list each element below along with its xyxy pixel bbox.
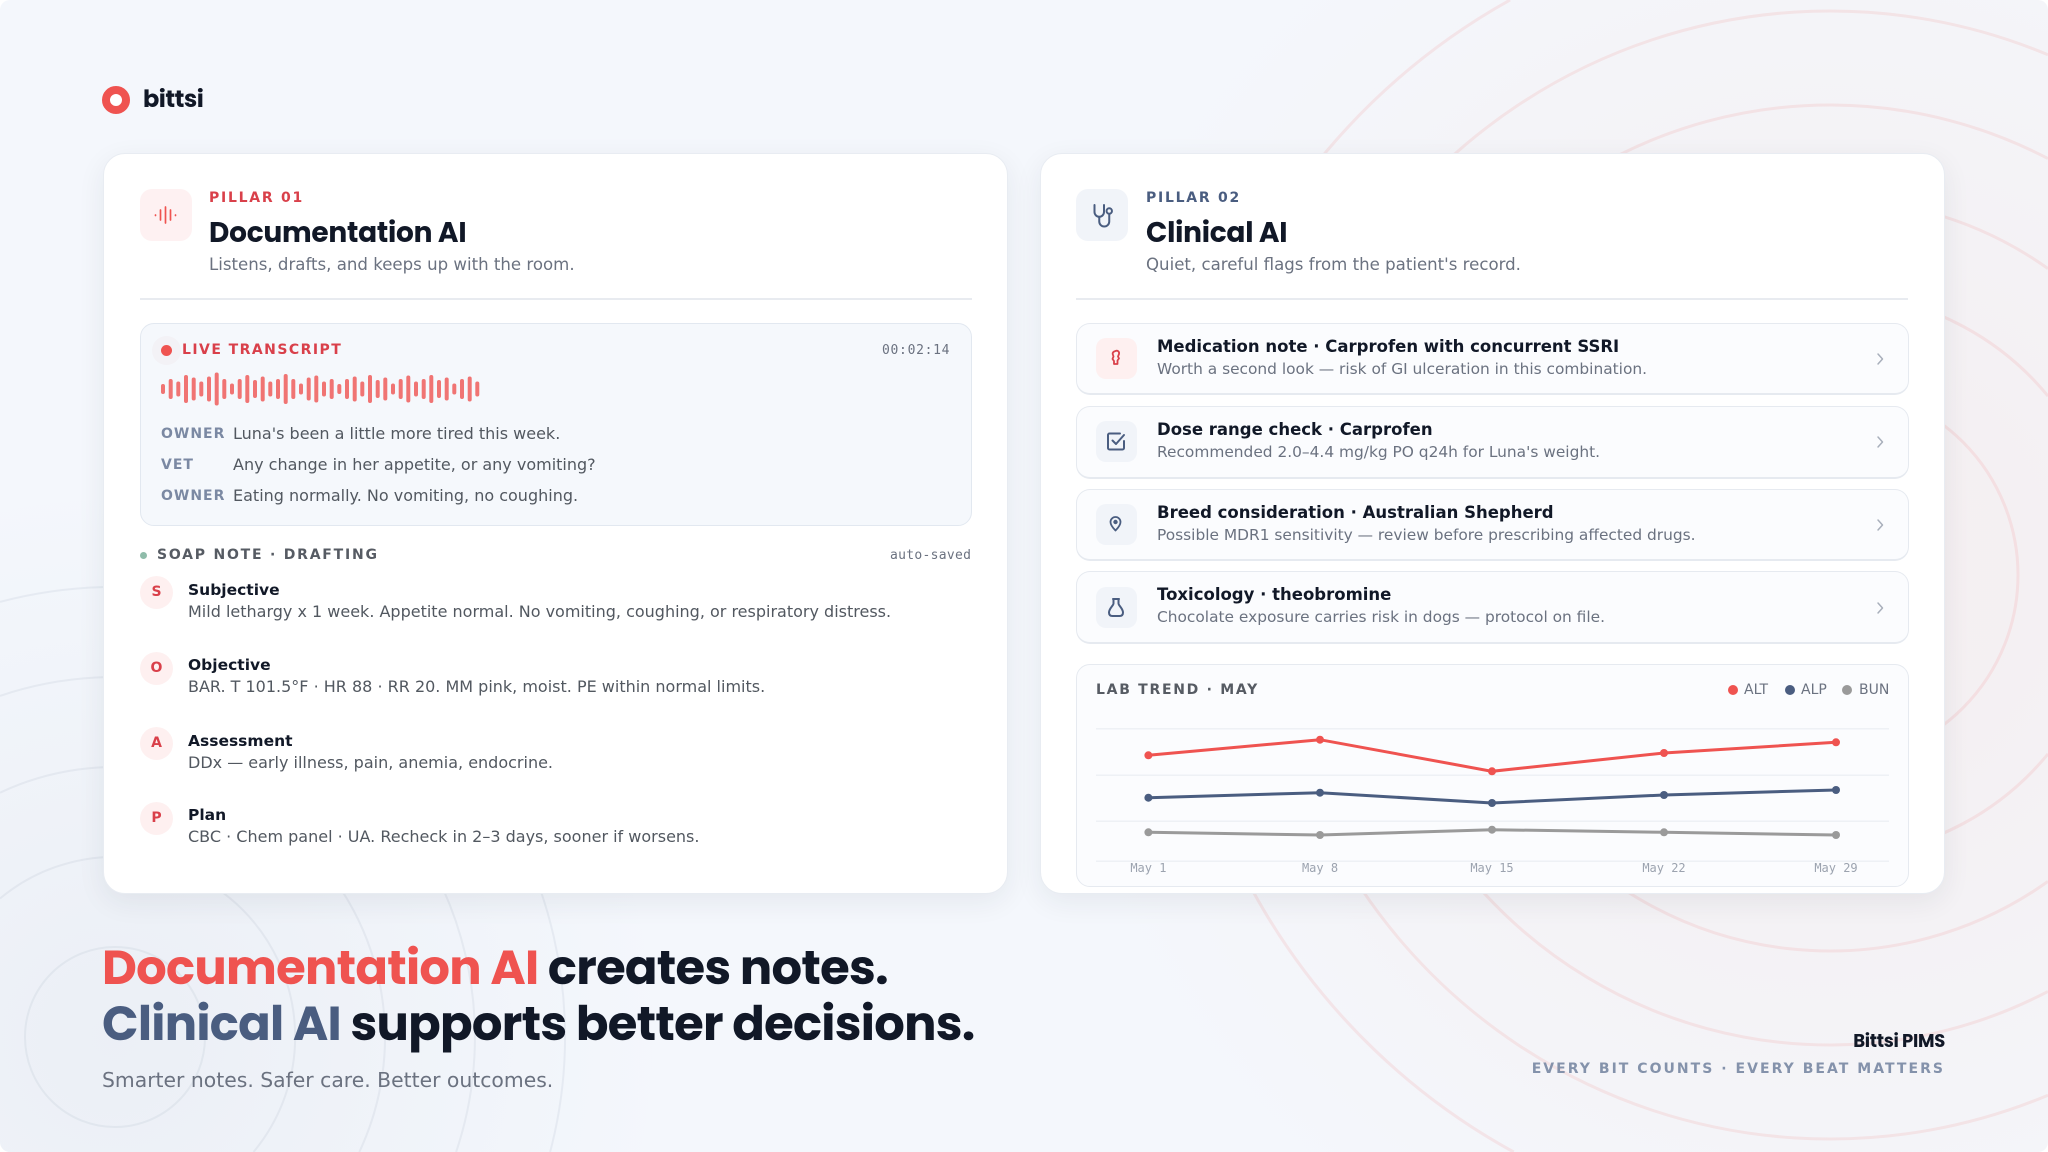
flag: breed consideration — [1076, 489, 1909, 561]
soap: objective — [140, 652, 765, 696]
soap: objective: O — [151, 660, 162, 676]
flag: breed consideration: Possible MDR1 sensitivity — review before prescribing affected drugs. — [1157, 526, 1696, 544]
flag: toxicology: Chocolate exposure carries risk in dogs — protocol on file. — [1157, 608, 1605, 626]
panel: Documentation AI — [103, 153, 1008, 894]
soap: subjective — [140, 576, 891, 621]
chart legend — [1728, 682, 1889, 698]
waveform — [161, 372, 480, 406]
series: ALP — [1144, 786, 1840, 807]
transcript line 1: Luna's been a little more tired this week. — [233, 424, 560, 443]
x axis labels: May 15 — [1470, 861, 1514, 875]
pillar 2 icon — [1076, 189, 1128, 241]
pillar 1 heading: Documentation AI — [209, 213, 466, 252]
brand name: bittsi — [143, 82, 203, 116]
x axis labels: May 29 — [1814, 861, 1858, 875]
soap: assessment: DDx — early illness, pain, anemia, endocrine. — [188, 753, 553, 772]
pillar 1 icon — [140, 189, 192, 241]
flag: medication note: Medication note · Carprofen with concurrent SSRI — [1157, 337, 1619, 356]
flag: dose range check — [1076, 406, 1909, 479]
chart legend: ALP — [1801, 682, 1827, 698]
flag: breed consideration: Breed consideration · Australian Shepherd — [1157, 503, 1554, 522]
flag: dose range check: Recommended 2.0–4.4 mg/kg PO q24h for Luna's weight. — [1157, 443, 1600, 461]
transcript line 1: OWNER — [161, 426, 225, 442]
pillar 2 eyebrow: PILLAR 02 — [1146, 190, 1241, 206]
transcript line 3: OWNER — [161, 488, 225, 504]
pillar 1 eyebrow: PILLAR 01 — [209, 190, 304, 206]
flag: medication note: Worth a second look — risk of GI ulceration in this combination. — [1157, 360, 1647, 378]
panel: live transcript — [140, 323, 972, 526]
x axis labels: May 22 — [1642, 861, 1686, 875]
chart legend: ALT — [1744, 682, 1768, 698]
flag: medication note — [1076, 323, 1909, 395]
transcript line 2: Any change in her appetite, or any vomiting? — [233, 454, 596, 474]
series: BUN — [1144, 826, 1840, 839]
headline — [102, 934, 975, 1057]
soap: subjective: Mild lethargy x 1 week. Appetite normal. No vomiting, coughing, or respiratory distress. — [188, 602, 891, 621]
footer brand: Bittsi PIMS — [1853, 1028, 1945, 1054]
series: ALT — [1144, 736, 1840, 775]
x axis labels: May 1 — [1130, 861, 1166, 875]
icon: logo ring — [102, 86, 130, 114]
soap: subjective: Subjective — [188, 581, 280, 599]
icon: checkbox — [1096, 421, 1137, 462]
soap: assessment — [140, 727, 553, 772]
flag: toxicology: Toxicology · theobromine — [1157, 585, 1391, 604]
soap: objective: BAR. T 101.5°F · HR 88 · RR 20. MM pink, moist. PE within normal limits. — [188, 677, 765, 696]
soap header: SOAP NOTE · DRAFTING — [157, 547, 379, 563]
auto-saved: auto-saved — [890, 548, 971, 563]
transcript line 2: VET — [161, 456, 194, 472]
transcript line 3: Eating normally. No vomiting, no coughing. — [233, 486, 578, 504]
icon: pill — [1096, 338, 1137, 379]
footer strapline: EVERY BIT COUNTS · EVERY BEAT MATTERS — [1532, 1060, 1945, 1076]
soap: plan: CBC · Chem panel · UA. Recheck in 2–3 days, sooner if worsens. — [188, 827, 699, 846]
soap: plan — [140, 802, 699, 846]
pillar 1 subtitle: Listens, drafts, and keeps up with the room. — [209, 255, 575, 274]
flag: dose range check: Dose range check · Carprofen — [1157, 420, 1433, 439]
soap: objective: Objective — [188, 656, 271, 674]
x axis labels: May 8 — [1302, 861, 1338, 875]
panel: Clinical AI — [1040, 153, 1945, 894]
x axis labels — [1130, 861, 1858, 875]
pillar 2 heading: Clinical AI — [1146, 213, 1287, 252]
headline: Documentation AI creates notes. — [102, 934, 888, 1000]
soap: subjective: S — [151, 584, 162, 600]
icon: location pin — [1096, 504, 1137, 545]
chart legend: BUN — [1859, 682, 1889, 698]
live transcript label: LIVE TRANSCRIPT — [182, 342, 342, 358]
icon: flask — [1096, 587, 1137, 628]
soap: assessment: A — [151, 734, 162, 750]
soap: assessment: Assessment — [188, 732, 293, 750]
soap header dot — [140, 552, 146, 558]
soap: plan: Plan — [188, 806, 226, 824]
live dot — [152, 336, 181, 365]
lab trend heading: LAB TREND · MAY — [1096, 682, 1259, 698]
timer: 00:02:14 — [882, 343, 950, 358]
flag: toxicology — [1076, 571, 1909, 644]
soap: plan: P — [151, 810, 162, 826]
panel: lab trend — [1076, 664, 1909, 887]
tagline: Smarter notes. Safer care. Better outcomes. — [102, 1068, 553, 1092]
logo — [102, 82, 203, 116]
pillar 2 subtitle: Quiet, careful flags from the patient's record. — [1146, 255, 1521, 274]
headline: Clinical AI supports better decisions. — [102, 990, 975, 1057]
